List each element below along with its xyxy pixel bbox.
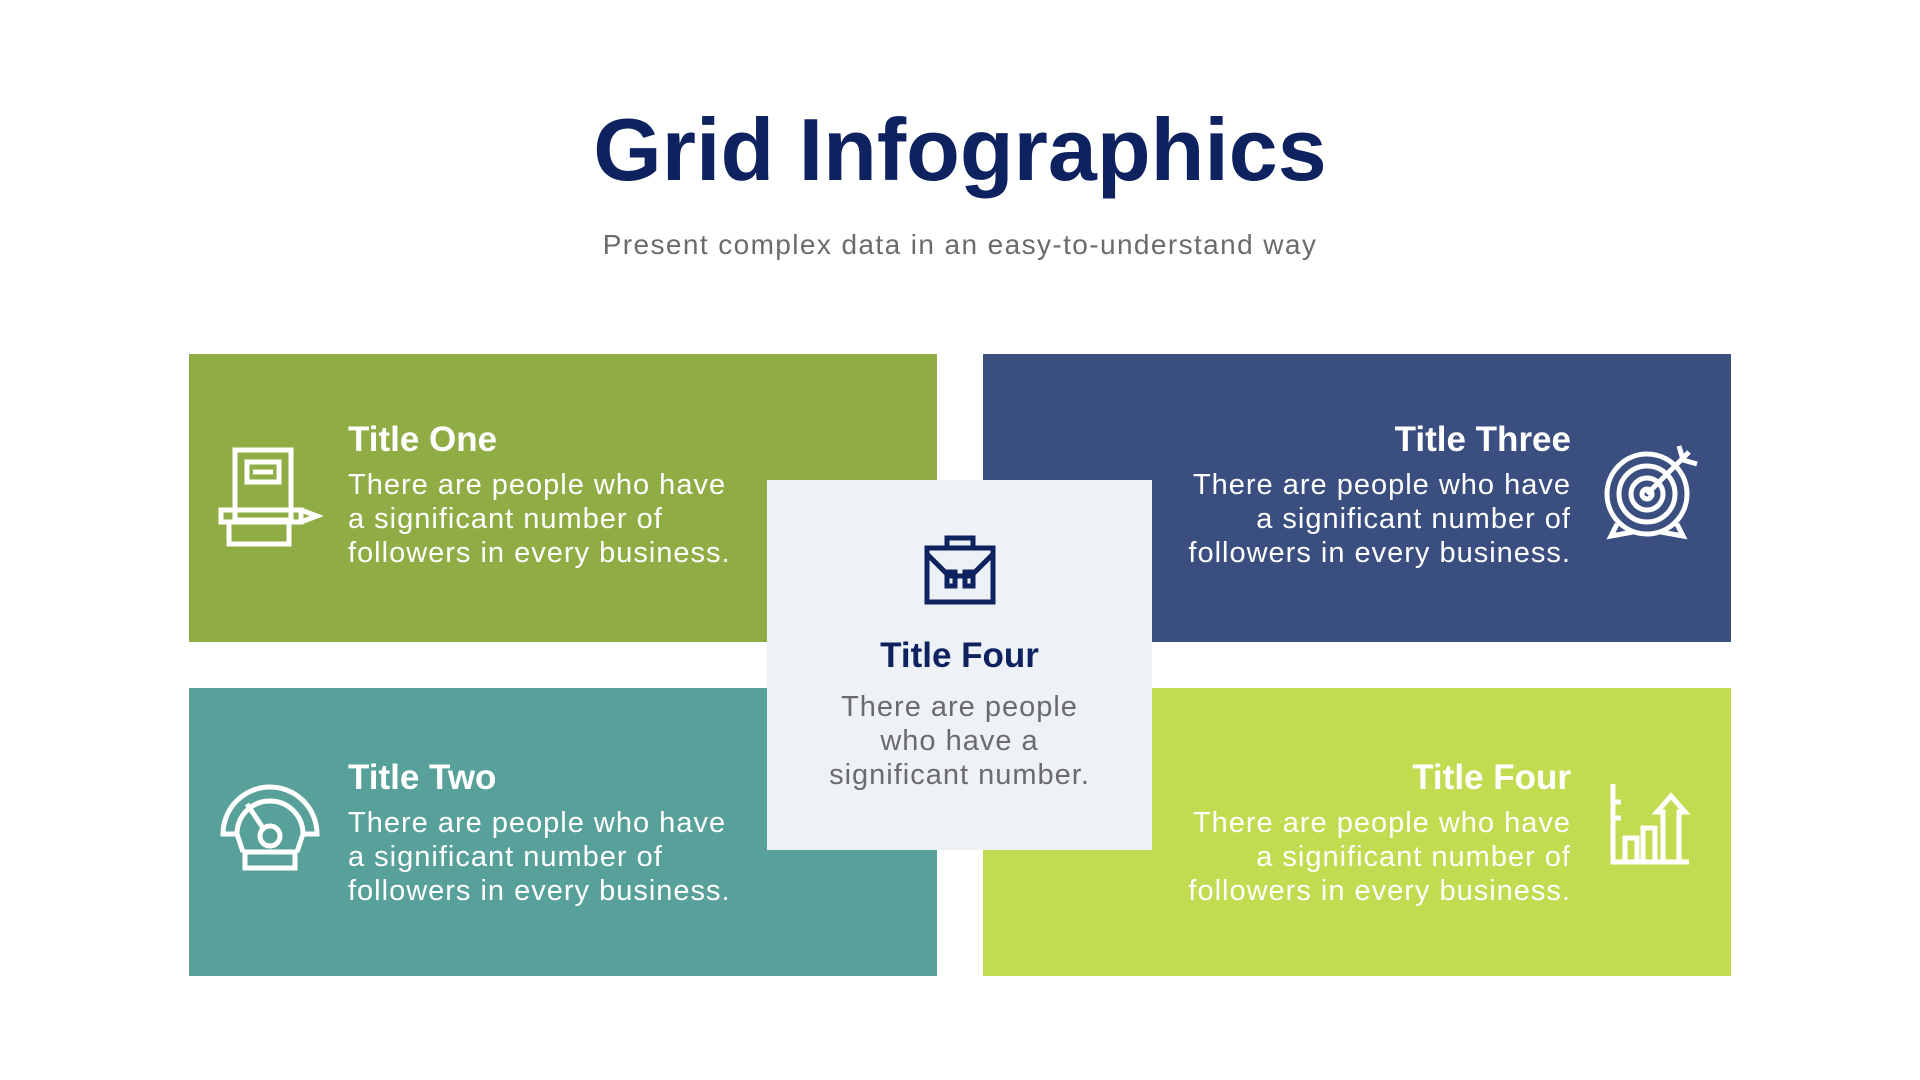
text: followers in every business. [348,537,731,569]
text: followers in every business. [1188,537,1571,569]
heading: Title Two [348,758,496,797]
text: There are people who have [1193,807,1571,839]
panel: title three [983,354,1731,642]
panel: title two [189,688,937,976]
panel: title one [189,354,937,642]
text: significant number. [829,759,1090,791]
text: There are people who have [348,807,726,839]
text [348,807,731,907]
text [1188,807,1571,907]
subtitle: Present complex data in an easy-to-understand way [603,229,1317,260]
text: a significant number of [1256,841,1571,873]
icon: growth chart [1610,784,1690,864]
title: Grid Infographics [593,100,1327,199]
icon: briefcase [924,536,996,604]
text: followers in every business. [1188,875,1571,907]
text [1188,469,1571,569]
text: a significant number of [348,841,663,873]
text: a significant number of [1256,503,1571,535]
panel: title four right [983,688,1731,976]
heading: Title Four [1412,758,1571,797]
icon: target [1604,445,1698,540]
icon: book with pen [218,448,323,546]
text: There are people who have [348,469,726,501]
text: There are people who have [1193,469,1571,501]
text: who have a [880,725,1039,757]
panel: center title four [767,480,1152,850]
text [829,691,1090,791]
heading: Title One [348,420,497,459]
text: followers in every business. [348,875,731,907]
icon: gauge [220,784,320,870]
heading: Title Four [880,636,1039,675]
text: a significant number of [348,503,663,535]
text [348,469,731,569]
heading: Title Three [1395,420,1571,459]
text: There are people [841,691,1078,723]
